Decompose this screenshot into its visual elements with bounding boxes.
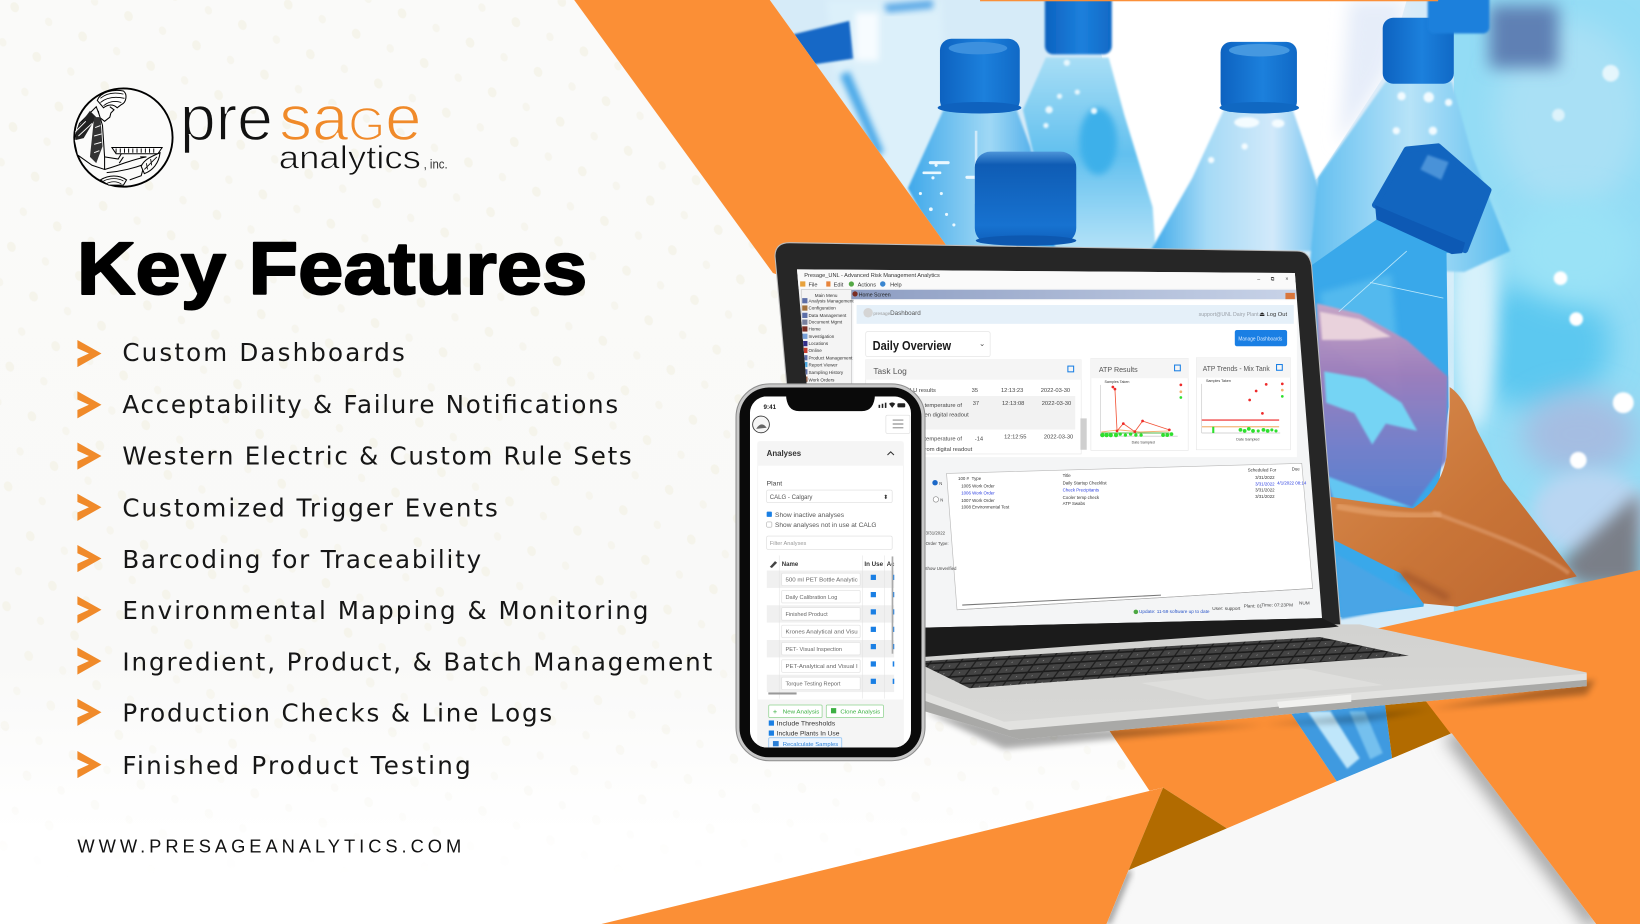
analyses table: Ac — [887, 562, 895, 568]
hinge shadow — [925, 618, 1339, 657]
analyses table: 500 ml PET Bottle Analytic — [785, 578, 858, 584]
card footer with buttons: Clone Analysis — [840, 710, 880, 716]
lower work order table: N — [939, 481, 942, 486]
status bar: Time: 07:23PM — [1261, 603, 1293, 608]
main menu sidebar: Home — [808, 327, 821, 332]
logo wordmark — [180, 82, 448, 175]
feature list — [77, 338, 713, 780]
laptop base front edge — [925, 674, 1587, 739]
filter checkboxes: Show analyses not in use at CALG — [775, 523, 877, 529]
orange shape: centre piece — [1103, 711, 1337, 828]
filter checkboxes — [767, 512, 877, 529]
card: ATP Results chart — [1091, 358, 1188, 450]
logo emblem: figure holding a bowl — [74, 88, 173, 187]
analyses table: In Use — [864, 562, 884, 568]
lower work order table — [925, 463, 1313, 610]
analyses table — [767, 555, 895, 699]
plant select: CALG - Calgary — [770, 495, 813, 501]
hand holding bottle — [1330, 387, 1577, 607]
lower work order table: 3/31/2022 — [1255, 481, 1275, 486]
phone status bar: 9:41 — [764, 404, 777, 411]
window menu: ⧉ — [1271, 276, 1275, 282]
laptop lid and bezel — [775, 243, 1341, 659]
window menu: File — [808, 283, 818, 289]
card: Task Log: -14 — [975, 436, 984, 442]
plant select — [767, 480, 892, 503]
bottle: A with cap — [908, 39, 1056, 251]
main menu sidebar: Analysis Management — [808, 298, 854, 303]
phone body — [736, 384, 925, 761]
bottle: F tilted, large — [1309, 146, 1488, 619]
phone notch — [786, 394, 875, 411]
analyses table: Daily Calibration Log — [785, 595, 837, 601]
status bar: NUM — [1299, 601, 1310, 606]
feature: Acceptability & Failure Notifications: Acceptability & Failure Notifications — [122, 390, 618, 419]
logo wordmark: pre — [180, 82, 273, 154]
laptop shadow — [925, 680, 1595, 749]
feature: Environmental Mapping & Monitoring: Environmental Mapping & Monitoring — [122, 596, 648, 625]
dashboard header: Dashboard — [890, 310, 921, 317]
main menu sidebar — [801, 290, 854, 384]
photo glimpse: blue stripes — [1290, 703, 1392, 781]
feature: Production Checks & Line Logs: Production Checks & Line Logs — [122, 699, 552, 728]
window menu — [800, 277, 1288, 288]
main menu sidebar: Document Mgmt — [808, 320, 843, 325]
window menu: Help — [890, 283, 902, 289]
card: Task Log: 12:12:55 — [1004, 434, 1026, 440]
keyboard — [925, 637, 1409, 688]
orange shape: right — [1372, 570, 1640, 924]
dark orange fold: centre — [1129, 788, 1227, 870]
main menu sidebar: Data Management — [808, 313, 847, 318]
card: Task Log: 2022-03-30 — [1041, 388, 1070, 394]
window menu: Edit — [834, 283, 844, 289]
logo wordmark: , inc. — [424, 157, 448, 171]
laptop — [775, 243, 1595, 749]
background: light dotted panel — [0, 0, 1126, 801]
analyses table: PET-Analytical and Visual I — [785, 664, 858, 670]
card footer with buttons — [758, 699, 903, 750]
website url: WWW.PRESAGEANALYTICS.COM — [77, 835, 461, 856]
lower work order table: Cooler temp check — [1063, 495, 1100, 500]
photo: blue water bottles and hand — [770, 0, 1640, 690]
card: Task Log: 12:13:23 — [1001, 388, 1023, 394]
logo wordmark: saGe — [279, 82, 422, 154]
feature: Ingredient, Product, & Batch Management: Ingredient, Product, & Batch Management — [122, 647, 713, 676]
main menu sidebar: Configuration — [808, 306, 836, 311]
lower work order table: Check Precipitants — [1063, 488, 1100, 493]
main menu sidebar: Online — [808, 348, 822, 353]
main menu sidebar: Product Management — [808, 355, 853, 360]
card: ATP Trends chart: Date Sampled — [1236, 437, 1259, 441]
card: ATP Trends chart — [1196, 358, 1290, 450]
dashboard header: Log Out — [1267, 312, 1287, 318]
card: ATP Results chart: ATP Results — [1099, 366, 1138, 374]
card footer with buttons: New Analysis — [783, 710, 820, 716]
lower work order table: 3/31/2022 — [1255, 494, 1275, 499]
dashboard selector: Daily Overview — [866, 332, 990, 357]
lower work order table: 1005 Work Order — [961, 483, 995, 488]
filter checkboxes: Show inactive analyses — [775, 513, 844, 519]
analyses card — [758, 442, 903, 755]
card: ATP Results chart: Date Sampled — [1132, 440, 1155, 444]
card: Task Log: rom digital readout — [925, 447, 973, 453]
card: Task Log: en digital readout — [925, 412, 969, 418]
card footer with buttons: + — [773, 707, 777, 716]
button: Manage Dashboards — [1235, 330, 1287, 346]
main menu sidebar: Sampling History — [808, 370, 844, 375]
lower work order table: N — [940, 498, 943, 503]
home screen bar — [851, 290, 1296, 299]
button: Manage Dashboards: Manage Dashboards — [1238, 336, 1283, 342]
laptop notch — [1277, 695, 1351, 708]
feature: Western Electric & Custom Rule Sets: Western Electric & Custom Rule Sets — [122, 441, 632, 470]
analyses table: Torque Testing Report — [785, 682, 841, 688]
window menu: Actions — [858, 283, 876, 289]
laptop base — [837, 624, 1587, 739]
phone screen — [750, 396, 911, 755]
card footer with buttons: Include Thresholds — [777, 721, 835, 727]
lower work order table: Daily Startup Checklist — [1063, 480, 1107, 485]
card footer with buttons: Include Plants In Use — [777, 732, 840, 738]
card: Task Log — [866, 360, 1087, 454]
phone — [736, 384, 925, 761]
lower work order table: 100 # — [958, 476, 970, 481]
window menu: × — [1285, 276, 1288, 282]
dashboard header — [857, 305, 1294, 324]
menu button — [886, 415, 910, 433]
lower work order table: 4/1/2022 08:14 — [1277, 480, 1307, 485]
main menu sidebar: Locations — [808, 341, 829, 346]
card footer with buttons: Recalculate Samples — [783, 742, 838, 748]
window menu: – — [1257, 276, 1260, 282]
status bar: Update: 11-59 software up to date — [1139, 609, 1210, 614]
lower work order table: Due — [1292, 467, 1300, 472]
dark orange fold: right — [1385, 699, 1452, 758]
trackpad — [1141, 668, 1384, 700]
analyses table: PET- Visual Inspection — [785, 647, 842, 653]
lower work order table: 1008 Environmental Test — [961, 504, 1010, 509]
dashboard header: ⏏ — [1259, 312, 1265, 318]
lower work order table: Type — [972, 476, 982, 481]
card: ATP Results chart: Samples Taken — [1104, 380, 1129, 384]
feature: Customized Trigger Events: Customized Trigger Events — [122, 494, 498, 523]
bottle: D centre — [1150, 42, 1318, 252]
feature: Custom Dashboards: Custom Dashboards — [122, 338, 405, 367]
lower work order table: Scheduled For — [1248, 468, 1277, 473]
bottle: C front dark cap — [975, 152, 1076, 246]
lower work order table: 1006 Work Order — [961, 491, 995, 496]
card: ATP Trends chart: Samples Taken — [1206, 379, 1231, 383]
card: Task Log: 35 — [972, 388, 978, 394]
plant select: Plant — [767, 480, 782, 487]
dashboard selector: Daily Overview: ⌄ — [979, 339, 985, 348]
filter input: Filter Analyses — [770, 541, 807, 547]
dashboard selector: Daily Overview: Daily Overview — [873, 338, 952, 353]
orange band: top diagonal — [574, 0, 947, 335]
phone status bar — [764, 402, 906, 409]
dashboard header: presage — [873, 311, 891, 316]
filter input — [767, 536, 892, 549]
bottle: B behind — [1023, 0, 1156, 251]
card: Task Log: temperature of — [925, 436, 962, 442]
analyses table: Finished Product — [785, 612, 828, 618]
main menu sidebar: Report Viewer — [808, 363, 838, 368]
status bar: Plant: 01 — [1244, 604, 1262, 609]
lower work order table: 3/31/2022 — [1255, 488, 1275, 493]
card: Task Log: 2022-03-30 — [1042, 401, 1071, 407]
card: Task Log: 12:13:08 — [1002, 401, 1024, 407]
analyses card: Analyses — [767, 448, 801, 458]
lower work order table: 3/31/2022 — [1255, 475, 1275, 480]
lower work order table: 1007 Work Order — [961, 498, 995, 503]
window title: Presage_UNL - Advanced Risk Management Analytics — [804, 273, 940, 279]
lower work order table: ATP Swabs — [1063, 501, 1086, 506]
analyses table: Name — [782, 562, 799, 568]
lower work order table: 3/31/2022 — [926, 530, 946, 535]
lower work order table: Title — [1063, 473, 1071, 478]
main menu sidebar: Main Menu — [815, 293, 838, 298]
bottle: E right — [1309, 0, 1510, 272]
card: ATP Trends chart: ATP Trends - Mix Tank — [1203, 365, 1270, 373]
phone logo — [753, 416, 769, 433]
plant select: ⬍ — [883, 494, 888, 501]
card: Task Log: 37 — [973, 401, 979, 407]
main menu sidebar: Work Orders — [808, 377, 835, 382]
status bar — [1134, 601, 1310, 614]
lower work order table: Order Type: — [926, 541, 949, 546]
logo: presage analytics — [74, 82, 448, 187]
card: Task Log: LU results — [910, 388, 936, 394]
dashboard body — [853, 300, 1297, 457]
logo wordmark: analytics — [279, 139, 421, 175]
orange shape: lower left triangle — [601, 788, 1163, 924]
title: Key Features: Key Features — [77, 227, 587, 310]
laptop screen — [797, 269, 1322, 628]
dashboard header: support@UNL Dairy Plant — [1199, 312, 1259, 318]
white shape with inner shadow — [1107, 733, 1596, 924]
main menu sidebar: Investigation — [808, 334, 835, 339]
card: Task Log: 2022-03-30 — [1044, 434, 1073, 440]
lower work order table: Show Unverified — [925, 566, 957, 571]
status bar: User: support — [1212, 606, 1241, 611]
card: Task Log: temperature of — [925, 403, 962, 409]
analyses table: Krones Analytical and Visu — [785, 630, 858, 636]
home screen bar: Home Screen — [859, 293, 891, 299]
feature: Finished Product Testing: Finished Product Testing — [122, 751, 471, 780]
card: Task Log: Task Log — [873, 366, 907, 376]
feature: Barcoding for Traceability: Barcoding for Traceability — [122, 545, 481, 574]
bottle: far left, pale — [794, 0, 937, 157]
